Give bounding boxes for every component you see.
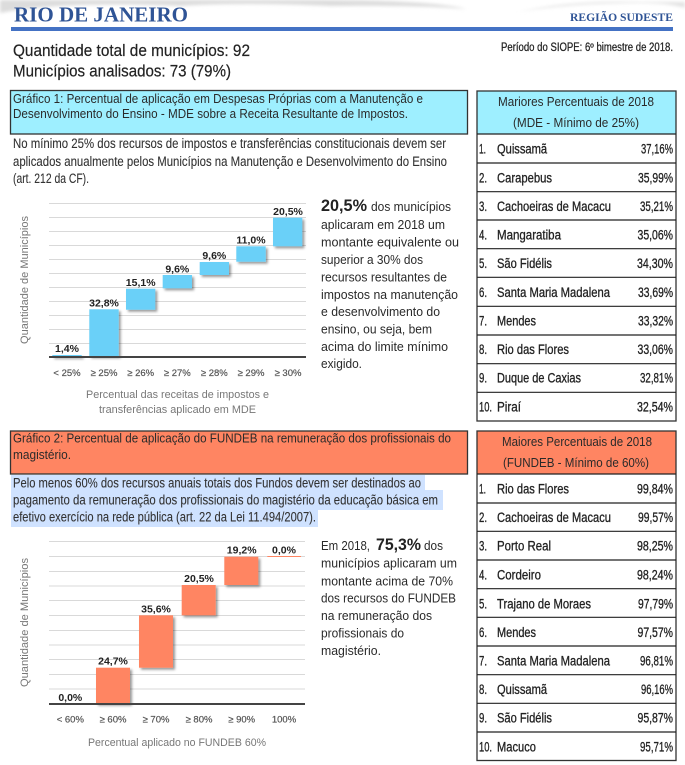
chart 2: FUNDEB waterfall: 0,0%: [272, 544, 297, 556]
chart 1: MDE waterfall: ≥ 25%: [91, 368, 118, 379]
chart 1: MDE waterfall: transferências aplicado em MDE: [99, 404, 256, 416]
chart 2: FUNDEB waterfall: Quantidade de Municípios: [19, 558, 31, 687]
title: RIO DE JANEIRO: [14, 2, 188, 26]
summary counts: Quantidade total de municípios: 92: [13, 41, 250, 60]
panel: MDE ranking table: 3.: [479, 199, 487, 214]
callout: 20,5%: exigido.: [321, 357, 362, 371]
panel: MDE ranking table: Mendes: [497, 314, 536, 329]
panel: MDE ranking table: 10.: [479, 400, 492, 415]
panel: FUNDEB ranking table: Mendes: [497, 625, 536, 640]
text block: MDE rule: No mínimo 25% dos recursos de impostos e transferências constitucionais devem ser: [13, 136, 446, 151]
callout: 75,3%: municípios aplicaram um: [321, 557, 457, 571]
panel: MDE ranking table: 9.: [479, 371, 487, 386]
callout: 20,5%: aplicaram em 2018 um: [321, 218, 445, 232]
callout: 75,3%: montante acima de 70%: [321, 575, 453, 589]
chart 1: MDE waterfall: 1,4%: [55, 343, 80, 355]
panel: FUNDEB ranking table: 99,84%: [637, 481, 673, 496]
panel: chart 1 heading: [10, 90, 468, 134]
panel: MDE ranking table: 35,21%: [640, 199, 673, 214]
chart 1: MDE waterfall: ≥ 30%: [275, 368, 302, 379]
panel: FUNDEB ranking table: 9.: [479, 711, 487, 726]
panel: FUNDEB ranking table: 5.: [479, 596, 487, 611]
panel: MDE ranking table: Quissamã: [497, 141, 547, 156]
chart 2: FUNDEB waterfall: [19, 542, 305, 749]
callout: 20,5%: 20,5%: [321, 197, 367, 215]
panel: MDE ranking table: 7.: [479, 314, 487, 329]
panel: FUNDEB ranking table: 8.: [479, 682, 487, 697]
panel: FUNDEB ranking table: 97,57%: [638, 625, 673, 640]
panel: MDE ranking table: 33,06%: [638, 342, 673, 357]
panel: MDE ranking table: Piraí: [497, 400, 521, 415]
panel: FUNDEB ranking table: Cordeiro: [497, 567, 541, 582]
chart 2: FUNDEB waterfall: 100%: [272, 715, 297, 726]
panel: MDE ranking table: 32,81%: [640, 371, 673, 386]
panel: MDE ranking table: [477, 91, 676, 421]
chart 2: FUNDEB waterfall: < 60%: [57, 715, 84, 726]
chart 1: MDE waterfall: 15,1%: [126, 277, 156, 289]
callout: 20,5%: e desenvolvimento do: [321, 305, 440, 319]
chart 2: FUNDEB waterfall: ≥ 80%: [186, 715, 213, 726]
panel: FUNDEB ranking table: Santa Maria Madalena: [497, 654, 610, 669]
panel: FUNDEB ranking table: 1.: [479, 481, 486, 496]
callout: 75,3%: 75,3%: [376, 536, 421, 554]
panel: MDE ranking table: 33,32%: [638, 314, 673, 329]
panel: FUNDEB ranking table: 2.: [479, 510, 487, 525]
chart 2: FUNDEB waterfall: 0,0%: [58, 692, 83, 704]
callout: 75,3%: [321, 536, 457, 658]
panel: FUNDEB ranking table: 99,57%: [638, 510, 673, 525]
panel: MDE ranking table: 1.: [479, 141, 486, 156]
callout: 20,5%: dos municípios: [371, 200, 451, 214]
callout: 75,3%: profissionais do: [321, 626, 404, 640]
panel: MDE ranking table: Duque de Caxias: [497, 371, 581, 386]
panel: MDE ranking table: 33,69%: [638, 285, 673, 300]
callout: 75,3%: Em 2018,: [321, 539, 370, 553]
panel: FUNDEB ranking table: 98,25%: [637, 539, 673, 554]
panel: FUNDEB ranking table: São Fidélis: [497, 711, 552, 726]
panel: FUNDEB ranking table: 95,71%: [640, 739, 673, 754]
callout: 75,3%: magistério.: [321, 644, 381, 658]
callout: 20,5%: impostos na manutenção: [321, 288, 458, 302]
chart 1: MDE waterfall: 9,6%: [202, 250, 227, 262]
panel: MDE ranking table: Cachoeiras de Macacu: [497, 199, 611, 214]
panel: chart 2 heading: [10, 430, 468, 474]
panel: MDE ranking table: 6.: [479, 285, 487, 300]
chart 1: MDE waterfall: Percentual das receitas de impostos e: [86, 389, 269, 401]
panel: FUNDEB ranking table: 97,79%: [638, 596, 673, 611]
panel: FUNDEB ranking table: 6.: [479, 625, 487, 640]
panel: MDE ranking table: Mangaratiba: [497, 228, 561, 242]
panel: chart 1 heading: Desenvolvimento do Ensino - MDE sobre a Receita Resultante de Impostos.: [13, 106, 408, 121]
callout: 20,5%: [321, 197, 459, 371]
callout: 75,3%: dos recursos do FUNDEB: [321, 592, 456, 606]
text block: MDE rule: [13, 136, 447, 186]
chart 2: FUNDEB waterfall: 19,2%: [227, 544, 257, 556]
panel: MDE ranking table: 35,99%: [638, 170, 673, 185]
callout: 20,5%: acima do limite mínimo: [321, 340, 448, 354]
chart 1: MDE waterfall: 20,5%: [273, 206, 304, 218]
chart 2: FUNDEB waterfall: ≥ 70%: [143, 715, 170, 726]
chart 1: MDE waterfall: ≥ 29%: [238, 368, 265, 379]
panel: FUNDEB ranking table: [477, 431, 676, 760]
panel: FUNDEB ranking table: Trajano de Moraes: [497, 596, 591, 611]
panel: chart 2 heading: Gráfico 2: Percentual de aplicação do FUNDEB na remuneração dos profissionais do: [13, 430, 451, 446]
text block: FUNDEB rule: Pelo menos 60% dos recursos anuais totais dos Fundos devem ser destinados ao: [13, 476, 421, 490]
chart 2: FUNDEB waterfall: ≥ 60%: [100, 715, 127, 726]
panel: MDE ranking table: Carapebus: [497, 170, 552, 185]
panel: MDE ranking table: 8.: [479, 342, 487, 357]
chart 1: MDE waterfall: [19, 204, 306, 416]
panel: FUNDEB ranking table: 7.: [479, 654, 487, 669]
panel: MDE ranking table: 5.: [479, 256, 487, 271]
region label: REGIÃO SUDESTE: [570, 10, 673, 24]
chart 2: FUNDEB waterfall: 35,6%: [141, 604, 172, 616]
text block: MDE rule: (art. 212 da CF).: [13, 171, 89, 186]
chart 1: MDE waterfall: ≥ 27%: [164, 368, 191, 379]
callout: 75,3%: dos: [424, 539, 443, 553]
panel: MDE ranking table: 32,54%: [637, 400, 673, 415]
callout: 75,3%: na remuneração dos: [321, 609, 432, 623]
panel: FUNDEB ranking table: Maiores Percentuais de 2018: [502, 434, 652, 449]
chart 2: FUNDEB waterfall: ≥ 90%: [228, 715, 256, 726]
summary counts: Municípios analisados: 73 (79%): [13, 62, 231, 80]
text block: MDE rule: aplicados anualmente pelos Municípios na Manutenção e Desenvolvimento do Ensino: [13, 154, 447, 169]
callout: 20,5%: ensino, ou seja, bem: [321, 322, 432, 336]
chart 1: MDE waterfall: 9,6%: [165, 264, 190, 276]
callout: 20,5%: recursos resultantes de: [321, 270, 447, 284]
text block: FUNDEB rule: pagamento da remuneração dos profissionais do magistério da educação básica em: [13, 492, 438, 508]
chart 1: MDE waterfall: Quantidade de Municípios: [19, 216, 31, 344]
panel: FUNDEB ranking table: Porto Real: [497, 539, 551, 554]
text block: FUNDEB rule: [11, 475, 443, 527]
header rule: [11, 27, 673, 31]
panel: MDE ranking table: Mariores Percentuais de 2018: [498, 94, 654, 109]
chart 2: FUNDEB waterfall: 20,5%: [184, 573, 215, 585]
panel: MDE ranking table: (MDE - Mínimo de 25%): [513, 115, 639, 130]
chart 2: FUNDEB waterfall: Percentual aplicado no FUNDEB 60%: [88, 737, 266, 749]
summary counts: [13, 41, 250, 80]
callout: 20,5%: montante equivalente ou: [321, 236, 459, 250]
chart 1: MDE waterfall: 11,0%: [236, 234, 266, 246]
panel: chart 1 heading: Gráfico 1: Percentual de aplicação em Despesas Próprias com a Manutenção e: [13, 91, 423, 106]
panel: FUNDEB ranking table: 95,87%: [638, 711, 673, 726]
chart 1: MDE waterfall: ≥ 28%: [201, 368, 228, 379]
panel: FUNDEB ranking table: 96,81%: [640, 654, 673, 669]
panel: FUNDEB ranking table: Rio das Flores: [497, 481, 569, 496]
panel: FUNDEB ranking table: 98,24%: [637, 567, 673, 582]
panel: chart 2 heading: magistério.: [13, 447, 71, 462]
panel: MDE ranking table: São Fidélis: [497, 256, 552, 271]
panel: FUNDEB ranking table: Cachoeiras de Macacu: [497, 510, 611, 525]
header: [11, 2, 673, 31]
panel: MDE ranking table: 35,06%: [638, 228, 673, 242]
callout: 20,5%: superior a 30% dos: [321, 253, 423, 267]
panel: FUNDEB ranking table: Quissamã: [497, 682, 547, 697]
chart 1: MDE waterfall: ≥ 26%: [127, 368, 155, 379]
chart 2: FUNDEB waterfall: 24,7%: [98, 656, 129, 668]
chart 1: MDE waterfall: 32,8%: [89, 298, 120, 310]
chart 1: MDE waterfall: < 25%: [53, 368, 81, 379]
panel: MDE ranking table: Rio das Flores: [497, 342, 569, 357]
panel: FUNDEB ranking table: Macuco: [497, 739, 536, 754]
panel: MDE ranking table: 4.: [479, 228, 487, 242]
panel: MDE ranking table: Santa Maria Madalena: [497, 285, 610, 300]
text block: FUNDEB rule: efetivo exercício na rede pública (art. 22 da Lei 11.494/2007).: [13, 510, 316, 524]
panel: MDE ranking table: 34,30%: [637, 256, 673, 271]
panel: FUNDEB ranking table: 10.: [479, 739, 492, 754]
panel: FUNDEB ranking table: 3.: [479, 539, 487, 554]
panel: MDE ranking table: 2.: [479, 170, 487, 185]
panel: FUNDEB ranking table: 4.: [479, 567, 487, 582]
panel: FUNDEB ranking table: (FUNDEB - Mínimo de 60%): [503, 455, 649, 470]
